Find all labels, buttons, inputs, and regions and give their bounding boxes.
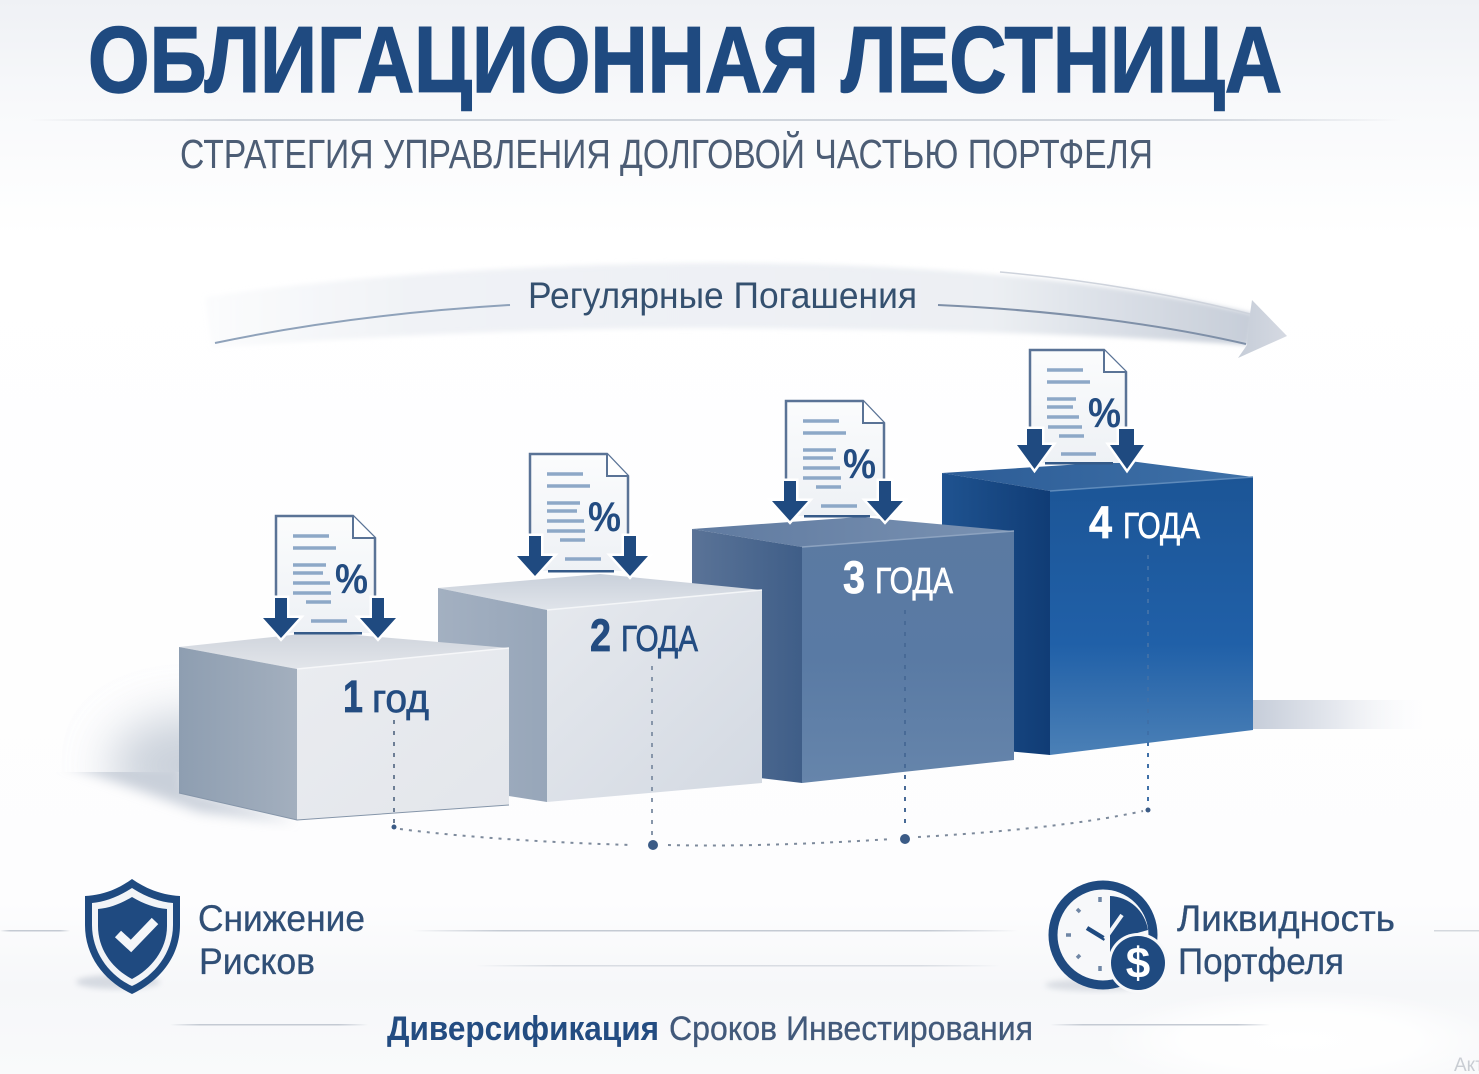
- label: 3 years: [843, 552, 953, 603]
- label: 1 year: год: [372, 677, 429, 721]
- label: 2 years: 2: [590, 610, 611, 661]
- icon: shield with check: [76, 879, 180, 994]
- label: 2 years: ГОДА: [621, 618, 698, 659]
- label: portfolio liquidity: [1177, 898, 1395, 982]
- label: risk reduction: Снижение: [198, 898, 365, 939]
- title: ОБЛИГАЦИОННАЯ ЛЕСТНИЦА: [88, 7, 1282, 112]
- footer: diversification caption: [387, 1010, 1033, 1048]
- icon: document with percent, 4 years: %: [1088, 389, 1121, 436]
- label: 3 years: 3: [843, 552, 865, 603]
- step: 4 years box: [942, 461, 1253, 755]
- arc label: Регулярные Погашения: [528, 275, 917, 316]
- label: 3 years: ГОДА: [875, 560, 953, 601]
- label: risk reduction: [198, 898, 365, 982]
- label: risk reduction: Рисков: [199, 941, 315, 982]
- icon: document with percent, 1 year: [263, 516, 396, 638]
- label: 1 year: 1: [343, 671, 363, 722]
- label: 4 years: [1089, 497, 1200, 548]
- step: 1 year box: [179, 632, 509, 820]
- icon: clock with dollar coin: [1045, 885, 1168, 993]
- icon: document with percent, 4 years: [1017, 350, 1144, 469]
- label: 4 years: 4: [1089, 497, 1112, 548]
- label: 2 years: [590, 610, 698, 661]
- label: 1 year: [343, 671, 429, 722]
- label: portfolio liquidity: Портфеля: [1178, 941, 1344, 982]
- icon: document with percent, 2 years: [517, 454, 648, 576]
- icon: document with percent, 2 years: %: [588, 493, 621, 540]
- icon: clock with dollar coin: $: [1126, 939, 1150, 988]
- icon: document with percent, 3 years: %: [843, 440, 876, 487]
- icon: document with percent, 3 years: [772, 401, 903, 521]
- subtitle: СТРАТЕГИЯ УПРАВЛЕНИЯ ДОЛГОВОЙ ЧАСТЬЮ ПОРТФЕЛЯ: [180, 131, 1153, 177]
- label: portfolio liquidity: Ликвидность: [1177, 898, 1395, 939]
- arrow: regular repayments arc: [205, 263, 1287, 358]
- step: 2 years box: [438, 574, 762, 802]
- timeline: dotted connectors: [392, 555, 1150, 850]
- footer: diversification caption: Диверсификация: [387, 1010, 659, 1048]
- footer: diversification caption: Сроков Инвестирования: [669, 1010, 1033, 1048]
- step: 3 years box: [692, 517, 1014, 783]
- icon: document with percent, 1 year: %: [335, 555, 368, 602]
- label: 4 years: ГОДА: [1123, 505, 1200, 546]
